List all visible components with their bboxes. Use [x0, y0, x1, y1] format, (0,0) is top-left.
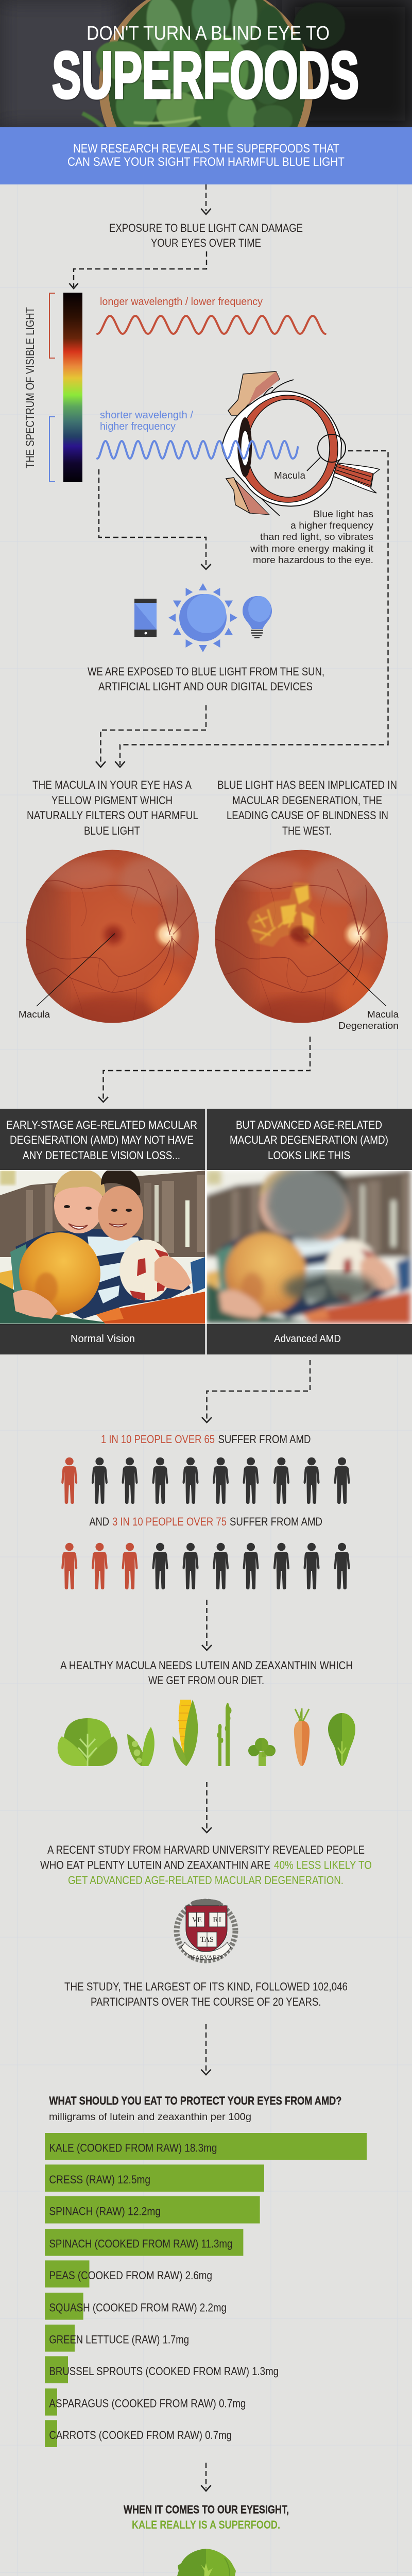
- text: exposed to blue light: WE ARE EXPOSED TO BLUE LIGHT FROM THE SUN,: [88, 665, 324, 678]
- arrow: retina to AMD panels: [98, 1037, 310, 1102]
- caption: advanced AMD: [207, 1324, 412, 1354]
- retina: macula degeneration: Degeneration: [338, 1021, 399, 1031]
- statistic: 1 in 10: SUFFER FROM AMD: [218, 1433, 311, 1446]
- statistic: 3 in 10: 3 IN 10 PEOPLE OVER 75: [112, 1515, 227, 1528]
- chart heading: WHAT SHOULD YOU EAT TO PROTECT YOUR EYES FROM AMD?: [49, 2094, 341, 2107]
- caption: normal vision: [0, 1324, 205, 1354]
- retina: macula degeneration: [203, 849, 399, 1031]
- text: macula pigment: BLUE LIGHT: [84, 824, 140, 837]
- blue wave: [97, 441, 298, 459]
- bar: cress: [45, 2164, 264, 2192]
- icon: light bulb: [243, 596, 272, 638]
- text: study size: PARTICIPANTS OVER THE COURSE OF 20 YEARS.: [91, 1995, 321, 2008]
- retina: healthy macula: Macula: [19, 1009, 50, 1020]
- text: Harvard study: WHO EAT PLENTY LUTEIN AND ZEAXANTHIN ARE: [40, 1859, 270, 1871]
- bar: asparagus: [45, 2388, 246, 2416]
- arrow: vegetables to study: [202, 1782, 212, 1833]
- bar: cress: CRESS (RAW) 12.5mg: [49, 2173, 150, 2186]
- bar: kale: KALE (COOKED FROM RAW) 18.3mg: [49, 2141, 217, 2155]
- text: blue light note: Blue light has: [313, 509, 373, 519]
- red bracket: [49, 293, 55, 358]
- panel: advanced AMD: MACULAR DEGENERATION (AMD): [230, 1133, 388, 1146]
- arrow: chart to conclusion: [201, 2463, 211, 2491]
- blue bracket: [49, 417, 55, 482]
- logo: Harvard crest: VE: [192, 1916, 202, 1924]
- banner: intro: [0, 127, 412, 184]
- panel: early stage AMD: DEGENERATION (AMD) MAY NOT HAVE: [10, 1133, 194, 1146]
- logo: Harvard crest: RI: [213, 1916, 221, 1924]
- arrow: exposure to spectrum: [69, 251, 207, 289]
- bar: asparagus: ASPARAGUS (COOKED FROM RAW) 0.7mg: [49, 2397, 246, 2410]
- bar: squash: SQUASH (COOKED FROM RAW) 2.2mg: [49, 2301, 227, 2314]
- label: macula: Macula: [274, 470, 306, 481]
- icon: corn: [173, 1700, 198, 1766]
- spectrum axis label: THE SPECTRUM OF VISIBLE LIGHT: [23, 307, 37, 468]
- blue wave label: [100, 410, 193, 432]
- blue wave label: shorter wavelength /: [100, 410, 193, 421]
- title: DON'T TURN A BLIND EYE TO: [87, 23, 330, 44]
- text: blindness: THE WEST.: [282, 824, 332, 837]
- statistic: 3 in 10: SUFFER FROM AMD: [230, 1515, 322, 1528]
- photo: advanced AMD: [206, 1166, 412, 1324]
- arrow: photos to statistics: [202, 1360, 310, 1422]
- retina: healthy macula: [14, 849, 199, 1031]
- red wave: [97, 316, 325, 334]
- arrow: macula to blue light text: [115, 451, 388, 767]
- blue wave label: higher frequency: [100, 421, 176, 432]
- text: Harvard study: A RECENT STUDY FROM HARVARD UNIVERSITY REVEALED PEOPLE: [47, 1843, 365, 1856]
- text: exposure: [109, 222, 303, 249]
- text: exposure: EXPOSURE TO BLUE LIGHT CAN DAMAGE: [109, 222, 303, 234]
- bar: green lettuce: [45, 2325, 189, 2352]
- arrow: study to chart: [201, 2024, 211, 2075]
- text: blue light note: than red light, so vibrates: [260, 532, 373, 542]
- spectrum bar: [63, 293, 82, 482]
- panel: early stage AMD: [0, 1109, 205, 1170]
- macula marker: [307, 434, 346, 471]
- text: Harvard study: GET ADVANCED AGE-RELATED MACULAR DEGENERATION.: [68, 1874, 344, 1887]
- logo: Harvard crest: [177, 1899, 235, 1961]
- arrow: banner to exposure: [201, 184, 211, 214]
- panel: advanced AMD: [207, 1109, 412, 1170]
- text: study size: [64, 1980, 348, 2008]
- icon: lettuce: [328, 1713, 355, 1766]
- text: exposed to blue light: [88, 665, 324, 693]
- text: blue light note: with more energy making it: [250, 544, 373, 554]
- text: macula pigment: YELLOW PIGMENT WHICH: [52, 794, 173, 807]
- text: healthy macula: WE GET FROM OUR DIET.: [148, 1674, 264, 1687]
- chart subheading: milligrams of lutein and zeaxanthin per 100g: [49, 2112, 251, 2123]
- icon: carrot: [294, 1708, 310, 1766]
- text: Harvard study: [40, 1843, 372, 1887]
- text: blue light note: a higher frequency: [290, 520, 373, 531]
- text: kale conclusion: KALE REALLY IS A SUPERFOOD.: [132, 2518, 280, 2531]
- icon: kale leaf: [177, 2549, 236, 2576]
- panel: advanced AMD: LOOKS LIKE THIS: [268, 1149, 350, 1162]
- bar: peas: PEAS (COOKED FROM RAW) 2.6mg: [49, 2269, 212, 2282]
- bar: peas: [45, 2260, 212, 2287]
- bar: carrots: [45, 2420, 232, 2447]
- people row: 3 of 10: [61, 1543, 350, 1589]
- text: macula pigment: [27, 778, 198, 837]
- statistic: 1 in 10: [101, 1433, 311, 1446]
- text: exposed to blue light: ARTIFICIAL LIGHT AND OUR DIGITAL DEVICES: [98, 680, 313, 693]
- panel: advanced AMD: BUT ADVANCED AGE-RELATED: [236, 1118, 382, 1131]
- bar: carrots: CARROTS (COOKED FROM RAW) 0.7mg: [49, 2429, 232, 2442]
- eye diagram: [222, 371, 380, 516]
- bar: green lettuce: GREEN LETTUCE (RAW) 1.7mg: [49, 2333, 189, 2346]
- text: macula pigment: NATURALLY FILTERS OUT HARMFUL: [27, 809, 198, 822]
- bar: kale: [45, 2133, 367, 2160]
- retina: macula degeneration: Macula: [367, 1009, 399, 1020]
- bar: brussel sprouts: [45, 2356, 279, 2383]
- bar: spinach raw: [45, 2196, 260, 2224]
- logo: Harvard crest: HARVARD: [190, 1954, 222, 1961]
- icon: peas: [127, 1727, 154, 1766]
- panel: early stage AMD: EARLY-STAGE AGE-RELATED MACULAR: [6, 1118, 197, 1131]
- text: blindness: [217, 778, 397, 837]
- panel gutter: [0, 1109, 412, 1354]
- logo: Harvard crest: TAS: [200, 1936, 214, 1944]
- bar chart: [45, 2133, 367, 2447]
- header photo: spinach bowl: [0, 0, 412, 127]
- text: exposure: YOUR EYES OVER TIME: [151, 236, 261, 249]
- text: Harvard study: 40% LESS LIKELY TO: [274, 1859, 372, 1871]
- text: kale conclusion: WHEN IT COMES TO OUR EYESIGHT,: [124, 2503, 289, 2516]
- statistic: 3 in 10: AND: [90, 1515, 109, 1528]
- caption: advanced AMD: Advanced AMD: [274, 1333, 341, 1345]
- statistic: 3 in 10: [90, 1515, 322, 1528]
- banner: intro: NEW RESEARCH REVEALS THE SUPERFOODS THAT: [73, 142, 339, 156]
- text: healthy macula: [60, 1659, 353, 1687]
- bar: squash: [45, 2293, 227, 2320]
- text: healthy macula: A HEALTHY MACULA NEEDS LUTEIN AND ZEAXANTHIN WHICH: [60, 1659, 353, 1672]
- bar: spinach cooked: SPINACH (COOKED FROM RAW) 11.3mg: [49, 2237, 232, 2250]
- text: kale conclusion: [124, 2503, 289, 2531]
- icon: phone: [134, 599, 157, 637]
- banner: intro: CAN SAVE YOUR SIGHT FROM HARMFUL BLUE LIGHT: [67, 155, 345, 169]
- bar: brussel sprouts: BRUSSEL SPROUTS (COOKED FROM RAW) 1.3mg: [49, 2365, 279, 2378]
- text: macula pigment: THE MACULA IN YOUR EYE HAS A: [32, 778, 192, 791]
- icon: asparagus: [217, 1703, 232, 1766]
- arrow: sources to macula text: [96, 705, 206, 767]
- red wave label: longer wavelength / lower frequency: [100, 296, 263, 308]
- photo: normal vision: [0, 1168, 206, 1324]
- panel: early stage AMD: ANY DETECTABLE VISION LOSS...: [23, 1149, 180, 1162]
- people row: 1 of 10: [61, 1458, 350, 1504]
- arrow: wave to sources: [99, 469, 211, 569]
- caption: normal vision: Normal Vision: [71, 1333, 135, 1345]
- arrow: people to diet: [202, 1600, 212, 1650]
- text: blue light note: [250, 509, 373, 565]
- text: study size: THE STUDY, THE LARGEST OF ITS KIND, FOLLOWED 102,046: [64, 1980, 348, 1993]
- statistic: 1 in 10: 1 IN 10 PEOPLE OVER 65: [101, 1433, 215, 1446]
- icon: sun: [168, 583, 237, 652]
- bar: spinach cooked: [45, 2229, 243, 2256]
- text: blue light note: more hazardous to the eye.: [253, 555, 373, 565]
- text: blindness: MACULAR DEGENERATION, THE: [232, 794, 382, 807]
- panel: light spectrum: [23, 293, 380, 565]
- icon: broccoli: [248, 1738, 276, 1766]
- icon: cabbage: [58, 1718, 117, 1766]
- bar: spinach raw: SPINACH (RAW) 12.2mg: [49, 2205, 161, 2217]
